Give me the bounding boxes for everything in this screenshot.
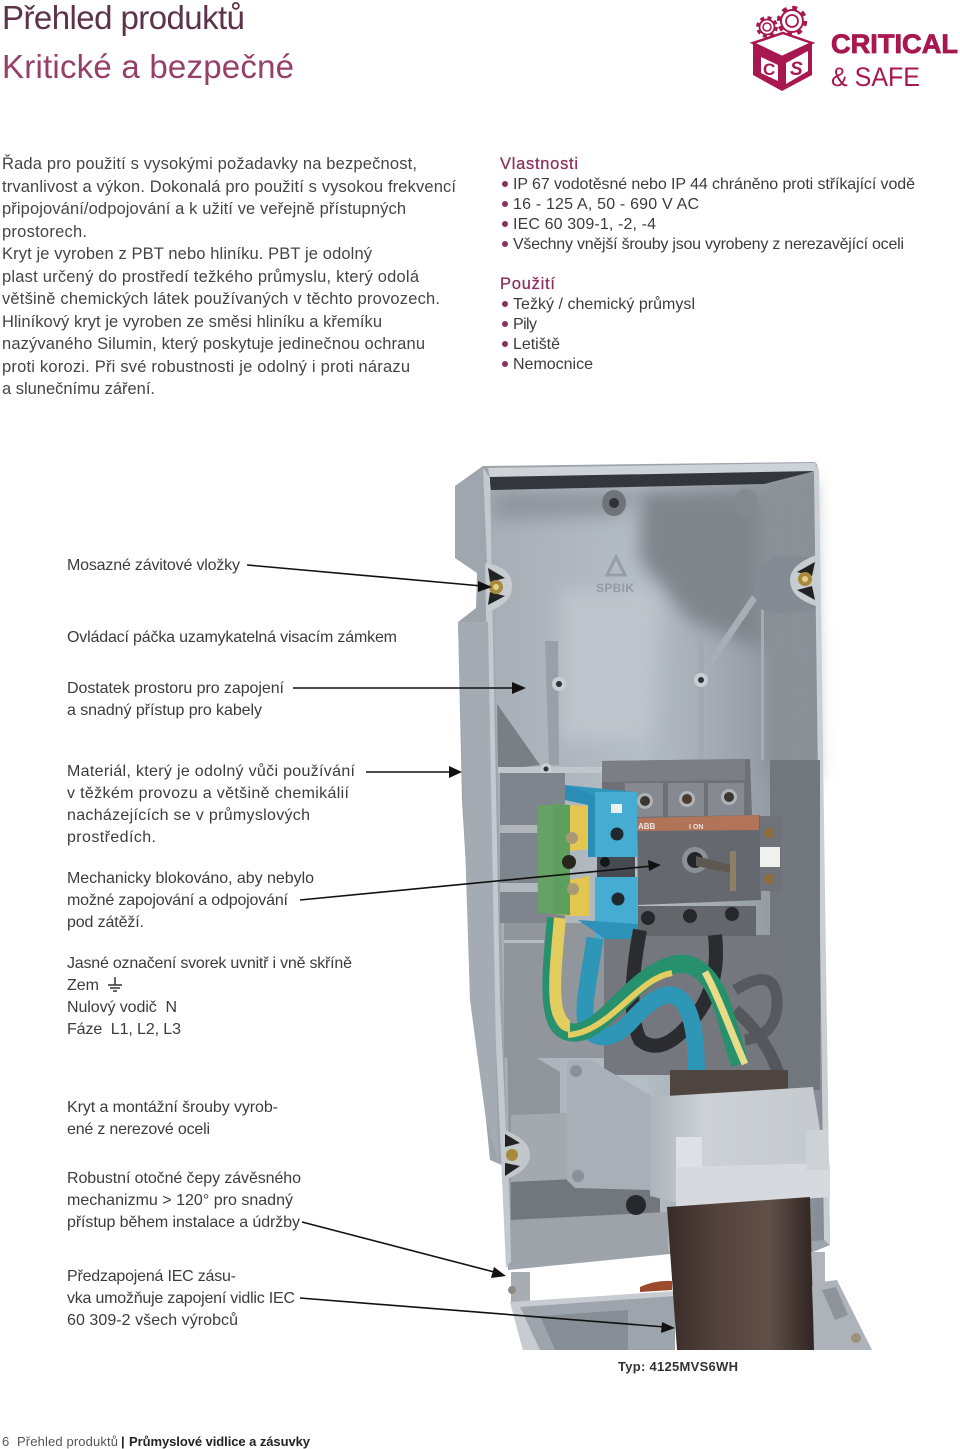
icon: cube: S	[790, 59, 803, 80]
features list: Vlastnosti	[500, 155, 915, 253]
icon: gears	[758, 8, 806, 36]
callout: stainless screws	[67, 1099, 278, 1138]
features list: Vlastnosti: IEC 60 309-1, -2, -4	[513, 216, 656, 233]
callout: pre-wired socket: vka umožňuje zapojení vidlic IEC	[67, 1290, 295, 1307]
intro text block	[2, 154, 456, 398]
applications list: Použití: Težký / chemický průmysl	[513, 295, 695, 313]
brass threaded inserts	[487, 555, 816, 1180]
logo: critical and safe	[753, 8, 958, 92]
callout: stainless screws: ené z nerezové oceli	[67, 1121, 210, 1138]
intro text block: Řada pro použití s vysokými požadavky na bezpečnost,	[2, 154, 417, 173]
green and yellow terminal	[537, 804, 589, 916]
intro text block: trvanlivost a výkon. Dokonalá pro použití s vysokou frekvencí	[2, 178, 456, 196]
footer: |	[121, 1434, 125, 1449]
cable gland and plug connector	[567, 1060, 830, 1207]
ABB rotary switch	[637, 815, 781, 905]
applications list: Použití	[500, 275, 695, 373]
callout: terminal marking: Nulový vodič N	[67, 999, 177, 1016]
icon: earth symbol	[108, 977, 122, 991]
title	[2, 0, 294, 85]
callout: material	[67, 762, 462, 846]
footer: 6	[2, 1434, 9, 1449]
switch terminals	[602, 759, 756, 936]
callout: hinge pins: Robustní otočné čepy závěsného	[67, 1170, 301, 1187]
intro text block: prostorech.	[2, 223, 87, 241]
callout: material: Materiál, který je odolný vůči používání	[67, 762, 356, 780]
applications list: Použití: Pily	[513, 316, 537, 333]
callout: wiring space: a snadný přístup pro kabely	[67, 702, 262, 719]
callout: terminal marking: Fáze L1, L2, L3	[67, 1021, 181, 1038]
enclosure body	[455, 462, 830, 1270]
mounting posts and ribs	[497, 489, 820, 1265]
callout: brass threaded inserts: Mosazné závitové vložky	[67, 557, 240, 574]
intro text block: Hliníkový kryt je vyroben ze směsi hliníku a křemíku	[2, 313, 382, 331]
intro text block: plast určený do prostředí težkého průmyslu, který odolá	[2, 268, 420, 286]
callout: wiring space	[67, 680, 526, 719]
blue terminal	[565, 785, 638, 939]
icon: cube: C	[763, 60, 775, 79]
ABB rotary switch: I ON	[689, 824, 703, 831]
callout: pre-wired socket: 60 309-2 všech výrobců	[67, 1311, 238, 1329]
title: Přehled produktů	[2, 0, 245, 36]
callout: lockable handle: Ovládací páčka uzamykatelná visacím zámkem	[67, 629, 397, 646]
intro text block: Kryt je vyroben z PBT nebo hliníku. PBT je odolný	[2, 245, 373, 263]
callout: terminal marking: Jasné označení svorek uvnitř i vně skříně	[67, 955, 352, 972]
intro text block: proti korozi. Při své robustnosti je odolný i proti nárazu	[2, 358, 410, 376]
features list: Vlastnosti: Všechny vnější šrouby jsou vyrobeny z nerezavějící oceli	[513, 236, 904, 253]
title: Kritické a bezpečné	[2, 48, 294, 85]
footer	[2, 1434, 311, 1449]
logo: critical and safe: & SAFE	[831, 62, 920, 92]
callout: mechanical interlock: pod zátěží.	[67, 914, 144, 931]
footer: Přehled produktů	[17, 1434, 118, 1449]
intro text block: nazývaného Silumin, který poskytuje jedinečnou ochranu	[2, 335, 425, 353]
callout: hinge pins: přístup během instalace a údržby	[67, 1214, 300, 1231]
ABB rotary switch: ABB	[638, 822, 656, 831]
callout: terminal marking: Zem	[67, 977, 99, 994]
applications list: Použití: Nemocnice	[513, 356, 593, 373]
features list: Vlastnosti: IP 67 vodotěsné nebo IP 44 chráněno proti stříkající vodě	[513, 176, 915, 193]
features list: Vlastnosti: Vlastnosti	[500, 155, 578, 173]
callout: mechanical interlock	[67, 860, 661, 931]
callout: material: nacházejících se v průmyslových	[67, 806, 310, 824]
product photo: open enclosure with switch and plug	[455, 462, 872, 1350]
recycling mark: SPBIK	[596, 581, 634, 595]
callout: mechanical interlock: možné zapojování a odpojování	[67, 892, 289, 909]
callout: hinge pins	[67, 1170, 506, 1278]
wires	[551, 918, 782, 1085]
callout: pre-wired socket	[67, 1268, 675, 1333]
callout: material: v těžkém provozu a většině chemikálií	[67, 785, 350, 802]
callout: wiring space: Dostatek prostoru pro zapojení	[67, 680, 285, 697]
applications list: Použití: Použití	[500, 275, 555, 293]
hinges and opened lid	[508, 1252, 872, 1350]
callout: material: prostředích.	[67, 829, 156, 846]
footer: Průmyslové vidlice a zásuvky	[129, 1434, 311, 1449]
product type caption: Typ: 4125MVS6WH	[618, 1359, 738, 1374]
plug body	[667, 1197, 814, 1350]
intro text block: a slunečnímu záření.	[2, 380, 155, 398]
features list: Vlastnosti: 16 - 125 A, 50 - 690 V AC	[513, 196, 699, 213]
intro text block: připojování/odpojování a k užití ve veřejně přístupných	[2, 200, 406, 218]
callout: hinge pins: mechanizmu > 120° pro snadný	[67, 1192, 293, 1209]
callout: stainless screws: Kryt a montážní šrouby vyrob-	[67, 1099, 278, 1116]
logo: critical and safe: CRITICAL	[831, 29, 958, 59]
intro text block: většině chemických látek používaných v těchto provozech.	[2, 290, 440, 308]
callout: pre-wired socket: Předzapojená IEC zásu-	[67, 1268, 236, 1285]
applications list: Použití: Letiště	[513, 336, 560, 353]
recycling mark	[596, 557, 634, 595]
icon: cube	[753, 33, 812, 91]
callout: mechanical interlock: Mechanicky blokováno, aby nebylo	[67, 870, 314, 887]
callout: terminal marking	[67, 955, 352, 1038]
callout: brass threaded inserts	[67, 557, 492, 592]
